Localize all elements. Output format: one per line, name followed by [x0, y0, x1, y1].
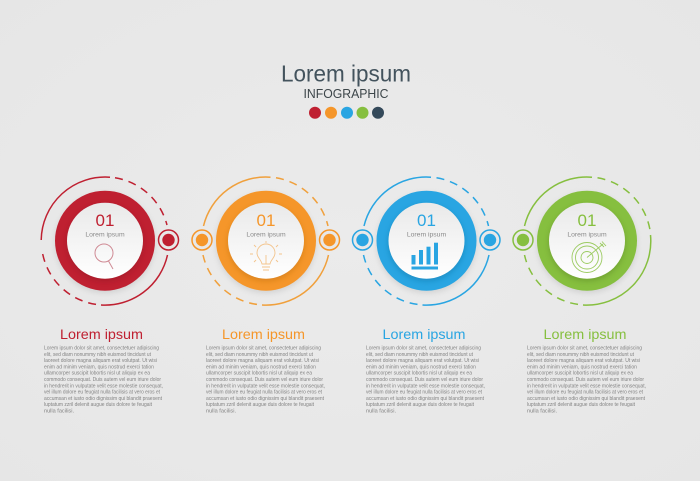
step 2 orange circle — [192, 177, 340, 305]
paragraph: elit, sed diam nonummy nibh euismod tincidunt ut — [527, 352, 635, 358]
column 1 text — [44, 326, 163, 414]
left node — [352, 230, 372, 250]
paragraph: nulla facilisi. — [206, 408, 236, 414]
outer orbit — [524, 177, 651, 305]
label: Lorem ipsum — [85, 232, 125, 238]
paragraph: vel illum dolore eu feugiat nulla facilisis at vero eros et — [206, 390, 323, 396]
step 4 green circle — [513, 177, 651, 305]
paragraph: vel illum dolore eu feugiat nulla facilisis at vero eros et — [366, 390, 483, 396]
icon: target — [572, 242, 606, 272]
paragraph — [366, 346, 485, 414]
paragraph: enim ad minim veniam, quis nostrud exerci tation — [206, 364, 316, 370]
paragraph: accumsan et iusto odio dignissim qui blandit praesent — [527, 396, 646, 402]
icon: bar chart — [412, 243, 438, 270]
paragraph: Lorem ipsum dolor sit amet, consectetuer adipiscing — [44, 346, 159, 352]
label: Lorem ipsum — [246, 232, 286, 238]
paragraph: Lorem ipsum dolor sit amet, consectetuer adipiscing — [206, 346, 321, 352]
paragraph: laoreet dolore magna aliquam erat volutpat. Ut wisi — [206, 358, 319, 364]
left node — [192, 230, 212, 250]
step 1 red circle — [41, 177, 179, 305]
number: 01 — [96, 211, 114, 230]
paragraph: commodo consequat. Duis autem vel eum iriure dolor — [44, 377, 161, 383]
paragraph: enim ad minim veniam, quis nostrud exerci tation — [527, 364, 637, 370]
paragraph: vel illum dolore eu feugiat nulla facilisis at vero eros et — [527, 390, 644, 396]
icon: magnifier — [95, 244, 113, 269]
paragraph — [527, 346, 646, 414]
paragraph: accumsan et iusto odio dignissim qui blandit praesent — [366, 396, 485, 402]
node — [513, 230, 533, 250]
paragraph: ullamcorper suscipit lobortis nisl ut aliquip ex ea — [366, 371, 472, 377]
paragraph: ullamcorper suscipit lobortis nisl ut aliquip ex ea — [527, 371, 633, 377]
paragraph: in hendrerit in vulputate velit esse molestie consequat, — [366, 383, 485, 389]
paragraph — [44, 346, 163, 414]
number: 01 — [578, 211, 596, 230]
heading: Lorem ipsum — [544, 326, 626, 342]
ring — [216, 191, 316, 293]
colour dots — [309, 107, 384, 119]
paragraph: laoreet dolore magna aliquam erat volutpat. Ut wisi — [366, 358, 479, 364]
outer orbit — [41, 177, 168, 305]
paragraph: elit, sed diam nonummy nibh euismod tincidunt ut — [206, 352, 314, 358]
paragraph — [206, 346, 325, 414]
paragraph: in hendrerit in vulputate velit esse molestie consequat, — [527, 383, 646, 389]
outer orbit — [364, 177, 489, 305]
paragraph: nulla facilisi. — [366, 408, 396, 414]
subtitle: INFOGRAPHIC — [304, 86, 388, 101]
paragraph: in hendrerit in vulputate velit esse molestie consequat, — [206, 383, 325, 389]
node — [158, 230, 178, 250]
column 4 text — [527, 326, 646, 414]
heading: Lorem ipsum — [60, 326, 143, 342]
paragraph: laoreet dolore magna aliquam erat volutpat. Ut wisi — [44, 358, 157, 364]
ring — [376, 191, 476, 293]
paragraph: ullamcorper suscipit lobortis nisl ut aliquip ex ea — [44, 371, 150, 377]
paragraph: enim ad minim veniam, quis nostrud exerci tation — [44, 364, 154, 370]
paragraph: nulla facilisi. — [44, 408, 74, 414]
number: 01 — [417, 211, 436, 230]
right node — [480, 230, 500, 250]
step 3 blue circle — [352, 177, 500, 305]
paragraph: elit, sed diam nonummy nibh euismod tincidunt ut — [44, 352, 152, 358]
column 3 text — [366, 326, 485, 414]
paragraph: ullamcorper suscipit lobortis nisl ut aliquip ex ea — [206, 371, 312, 377]
paragraph: Lorem ipsum dolor sit amet, consectetuer adipiscing — [527, 346, 642, 352]
paragraph: commodo consequat. Duis autem vel eum iriure dolor — [527, 377, 644, 383]
label: Lorem ipsum — [407, 232, 446, 238]
paragraph: vel illum dolore eu feugiat nulla facilisis at vero eros et — [44, 390, 161, 396]
title block — [281, 60, 411, 119]
ring — [55, 191, 155, 293]
paragraph: luptatum zzril delenit augue duis dolore te feugait — [527, 402, 636, 408]
paragraph: commodo consequat. Duis autem vel eum iriure dolor — [366, 377, 483, 383]
heading: Lorem ipsum — [222, 326, 305, 342]
ring — [537, 191, 637, 293]
paragraph: luptatum zzril delenit augue duis dolore te feugait — [366, 402, 475, 408]
icon: light bulb — [250, 241, 282, 270]
outer orbit — [203, 177, 328, 305]
label: Lorem ipsum — [567, 232, 607, 238]
paragraph: luptatum zzril delenit augue duis dolore te feugait — [44, 402, 153, 408]
paragraph: in hendrerit in vulputate velit esse molestie consequat, — [44, 383, 163, 389]
paragraph: laoreet dolore magna aliquam erat volutpat. Ut wisi — [527, 358, 640, 364]
paragraph: Lorem ipsum dolor sit amet, consectetuer adipiscing — [366, 346, 481, 352]
paragraph: enim ad minim veniam, quis nostrud exerci tation — [366, 364, 476, 370]
heading: Lorem ipsum — [382, 326, 466, 342]
number: 01 — [257, 211, 275, 230]
paragraph: commodo consequat. Duis autem vel eum iriure dolor — [206, 377, 323, 383]
paragraph: nulla facilisi. — [527, 408, 557, 414]
paragraph: accumsan et iusto odio dignissim qui blandit praesent — [44, 396, 163, 402]
right node — [320, 230, 340, 250]
paragraph: accumsan et iusto odio dignissim qui blandit praesent — [206, 396, 325, 402]
paragraph: luptatum zzril delenit augue duis dolore te feugait — [206, 402, 315, 408]
column 2 text — [206, 326, 325, 414]
title: Lorem ipsum — [281, 60, 411, 86]
paragraph: elit, sed diam nonummy nibh euismod tincidunt ut — [366, 352, 474, 358]
